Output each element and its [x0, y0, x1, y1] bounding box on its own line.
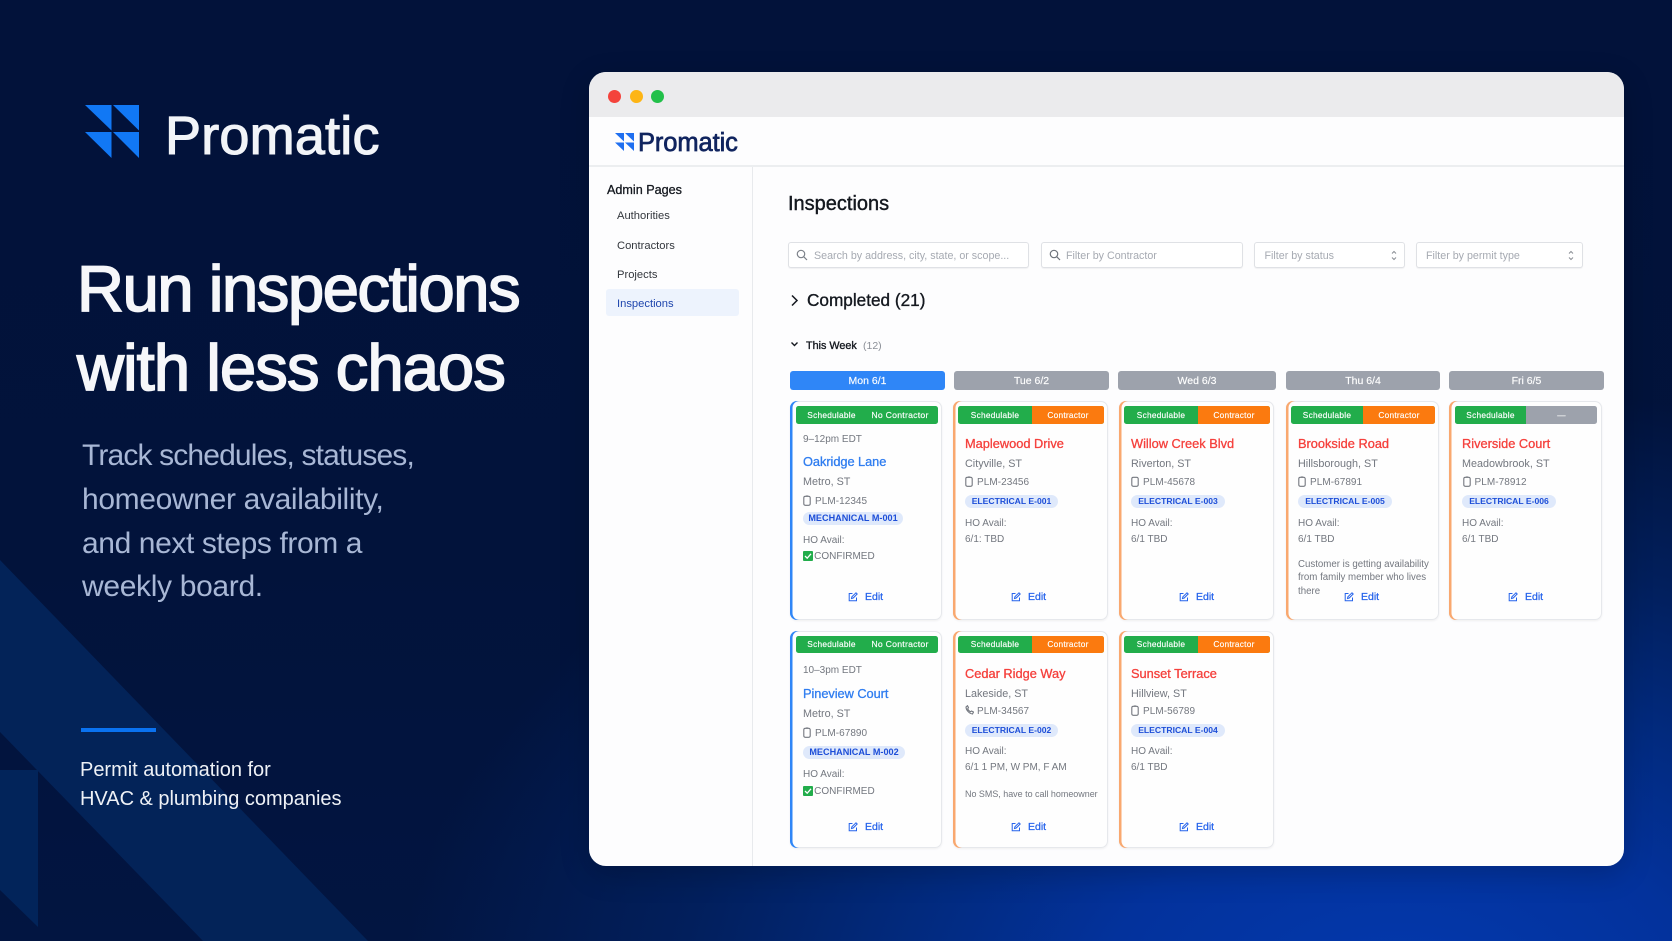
note [1298, 558, 1429, 597]
location: Hillsborough, ST [1298, 458, 1378, 470]
permit type pill [1462, 495, 1556, 508]
edit action: Edit [1196, 591, 1214, 603]
day header: Thu: Thu 6/4 [1345, 375, 1381, 387]
permit type pill [1298, 495, 1392, 508]
permit type pill [1131, 724, 1225, 737]
permit number: PLM-67891 [1310, 476, 1362, 488]
tagline [80, 759, 341, 810]
permit type pill: ELECTRICAL E-006 [1469, 496, 1549, 506]
homeowner availability: 6/1 TBD [1131, 762, 1168, 773]
address: Maplewood Drive [965, 436, 1064, 450]
brand logo: Promatic [85, 105, 380, 166]
week count: (12) [863, 340, 882, 352]
nav: Projects: Projects [617, 269, 657, 281]
headline: with less chaos [77, 331, 505, 404]
address: Pineview Court [803, 686, 888, 700]
icon: Promatic triangles mark [85, 105, 139, 158]
search input: Search by address, city, state, or scope... [814, 250, 1009, 262]
icon: search [1050, 250, 1060, 260]
card: Riverside Court [1449, 401, 1602, 620]
status badges: Contractor [1047, 410, 1089, 420]
homeowner availability: 6/1 TBD [1462, 534, 1498, 545]
icon: close dot [608, 90, 621, 103]
status badges [796, 406, 938, 424]
icon: select arrows [1568, 250, 1574, 260]
edit action [1508, 591, 1544, 603]
note: No SMS, have to call homeowner [965, 788, 1098, 798]
edit action: Edit [865, 591, 883, 603]
permit type pill: ELECTRICAL E-001 [972, 496, 1051, 506]
day header: Thu [1286, 371, 1440, 390]
sidebar navigation [606, 289, 739, 316]
homeowner availability: HO Avail: [1462, 518, 1504, 529]
permit type pill: ELECTRICAL E-002 [972, 725, 1051, 735]
homeowner availability: 6/1 TBD [1131, 534, 1168, 545]
homeowner availability: HO Avail: [1298, 518, 1340, 529]
contractor filter: Filter by Contractor [1066, 250, 1157, 262]
time: 10–3pm EDT [803, 665, 862, 676]
completed section header [792, 290, 925, 310]
homeowner availability: HO Avail: [965, 518, 1006, 529]
edit action [1180, 591, 1214, 603]
status badges: — [1557, 410, 1566, 420]
permit number: PLM-78912 [1474, 476, 1527, 488]
icon: green check [803, 551, 813, 561]
subheading: weekly board. [82, 570, 263, 603]
edit action: Edit [865, 821, 883, 833]
status badges: No Contractor [871, 410, 929, 420]
app header logo [615, 129, 738, 157]
permit number: PLM-34567 [977, 706, 1029, 716]
location: Hillview, ST [1131, 688, 1187, 700]
homeowner availability: HO Avail: [803, 769, 844, 780]
permit type pill: MECHANICAL M-001 [808, 513, 898, 523]
permit type pill [803, 746, 905, 759]
homeowner availability: HO Avail: [1131, 518, 1172, 529]
homeowner availability [965, 746, 1067, 773]
status badges: Schedulable [1137, 410, 1185, 420]
status badges [1455, 406, 1597, 424]
status badges: Schedulable [1466, 410, 1515, 420]
card: Pineview Court [790, 631, 942, 848]
edit action [848, 821, 884, 833]
card: Cedar Ridge Way [953, 631, 1108, 848]
homeowner availability: HO Avail: [1131, 746, 1172, 757]
window title bar [589, 72, 1624, 117]
card: Sunset Terrace [1119, 631, 1274, 848]
status badges [1124, 406, 1270, 424]
day header: Wed: Wed 6/3 [1178, 375, 1216, 387]
day header: Wed [1118, 371, 1276, 390]
permit type pill [1131, 495, 1225, 508]
status badges [1291, 406, 1435, 424]
homeowner availability [1131, 518, 1172, 545]
status filter [1254, 242, 1405, 268]
address: Riverside Court [1462, 436, 1550, 450]
note: Customer is getting availability [1298, 558, 1429, 570]
location: Riverton, ST [1131, 458, 1191, 470]
edit action [1012, 821, 1046, 833]
day header: Mon: Mon 6/1 [849, 375, 886, 387]
icon: chevron down [791, 342, 798, 346]
permit type pill [965, 724, 1058, 737]
status badges [796, 636, 938, 653]
permit type pill [965, 495, 1058, 508]
permit number [1131, 704, 1195, 718]
address: Oakridge Lane [803, 454, 886, 468]
status badges: Schedulable [971, 639, 1019, 649]
edit action [1012, 591, 1046, 603]
location: Lakeside, ST [965, 688, 1028, 700]
search input [788, 242, 1029, 268]
address: Sunset Terrace [1131, 666, 1217, 680]
day header: Fri [1449, 371, 1604, 390]
permit type filter: Filter by permit type [1426, 250, 1520, 262]
tagline: HVAC & plumbing companies [80, 788, 341, 810]
edit action [1180, 820, 1222, 834]
card: Brookside Road [1286, 401, 1439, 620]
status badges [1124, 636, 1270, 653]
note: from family member who lives [1298, 572, 1426, 583]
permit type pill: ELECTRICAL E-005 [1305, 496, 1385, 506]
status badges: Contractor [1213, 410, 1255, 420]
icon: green check [803, 786, 813, 796]
edit action: Edit [1196, 821, 1214, 833]
this week label: This Week [806, 340, 857, 352]
permit number: PLM-67890 [815, 728, 867, 738]
edit action: Edit [1028, 591, 1046, 603]
permit type pill: ELECTRICAL E-004 [1138, 725, 1218, 735]
nav: Inspections: Inspections [617, 298, 674, 310]
edit action: Edit [1028, 821, 1046, 833]
status badges: Schedulable [807, 410, 856, 420]
status badges: Schedulable [807, 639, 856, 649]
contractor filter [1041, 242, 1243, 268]
homeowner availability [965, 518, 1006, 545]
homeowner availability: 6/1: TBD [965, 534, 1004, 545]
edit action: Edit [1361, 591, 1379, 603]
permit type pill: ELECTRICAL E-003 [1138, 496, 1218, 506]
status badges: No Contractor [871, 639, 929, 649]
headline: Run inspections [77, 252, 519, 325]
permit type pill: MECHANICAL M-002 [809, 747, 899, 757]
permit type filter [1416, 242, 1583, 268]
permit type pill [803, 512, 903, 525]
permit number: PLM-12345 [815, 496, 867, 506]
sidebar heading: Admin Pages [607, 183, 682, 197]
day header: Tue: Tue 6/2 [1014, 375, 1049, 387]
status badges [958, 636, 1104, 653]
day header: Mon [790, 371, 945, 390]
icon: search [796, 250, 808, 260]
edit action [848, 591, 884, 603]
subheading [82, 439, 414, 603]
edit action: Edit [1525, 591, 1543, 603]
this week section header [791, 340, 882, 352]
permit number: PLM-45678 [1143, 476, 1195, 488]
address: Cedar Ridge Way [965, 666, 1066, 680]
location: Cityville, ST [965, 458, 1022, 470]
permit number: PLM-56789 [1143, 706, 1195, 716]
icon: chevron right [792, 295, 798, 306]
address: Willow Creek Blvd [1131, 436, 1234, 450]
card: Oakridge Lane [790, 401, 942, 620]
homeowner availability: CONFIRMED [814, 786, 875, 797]
location: Metro, ST [803, 476, 850, 488]
icon: maximize dot [651, 90, 664, 103]
status badges [958, 406, 1104, 424]
headline [76, 252, 520, 404]
homeowner availability [1462, 518, 1504, 545]
completed label: Completed (21) [807, 290, 925, 310]
homeowner availability: HO Avail: [803, 535, 844, 546]
icon: minimize dot [630, 90, 643, 103]
brand name: Promatic [165, 106, 380, 166]
card: Maplewood Drive [953, 401, 1108, 620]
day header: Tue [954, 371, 1109, 390]
homeowner availability: CONFIRMED [814, 551, 875, 562]
status badges: Contractor [1047, 639, 1089, 649]
location: Metro, ST [803, 708, 850, 720]
nav: Contractors: Contractors [617, 240, 675, 252]
app window panel [589, 72, 1624, 866]
tagline: Permit automation for [80, 759, 271, 781]
homeowner availability: 6/1 1 PM, W PM, F AM [965, 762, 1067, 773]
status badges: Contractor [1213, 639, 1255, 649]
status badges: Schedulable [1137, 639, 1185, 649]
subheading: Track schedules, statuses, [82, 439, 414, 472]
subheading: and next steps from a [82, 527, 362, 560]
edit action [1344, 591, 1380, 603]
page heading: Inspections [788, 193, 889, 215]
homeowner availability: 6/1 TBD [1298, 534, 1334, 545]
accent rule [81, 728, 156, 732]
subheading: homeowner availability, [82, 483, 384, 516]
homeowner availability: HO Avail: [965, 746, 1006, 757]
nav: Authorities: Authorities [617, 210, 670, 222]
status filter: Filter by status [1264, 250, 1334, 262]
icon: select arrows [1392, 250, 1396, 260]
status badges: Schedulable [971, 410, 1019, 420]
card: Willow Creek Blvd [1119, 401, 1274, 620]
homeowner availability [1131, 744, 1172, 776]
homeowner availability [1298, 518, 1340, 545]
app brand name: Promatic [638, 129, 738, 157]
day header: Fri: Fri 6/5 [1512, 375, 1541, 387]
status badges: Schedulable [1303, 410, 1351, 420]
note: there [1298, 586, 1320, 597]
homeowner availability [803, 769, 875, 797]
active nav highlight [606, 289, 739, 316]
icon: small Promatic mark [615, 133, 634, 151]
address: Brookside Road [1298, 436, 1389, 450]
location: Meadowbrook, ST [1462, 458, 1550, 470]
time: 9–12pm EDT [803, 434, 862, 445]
status badges: Contractor [1378, 410, 1420, 420]
homeowner availability [803, 535, 875, 562]
permit number: PLM-23456 [977, 476, 1029, 488]
